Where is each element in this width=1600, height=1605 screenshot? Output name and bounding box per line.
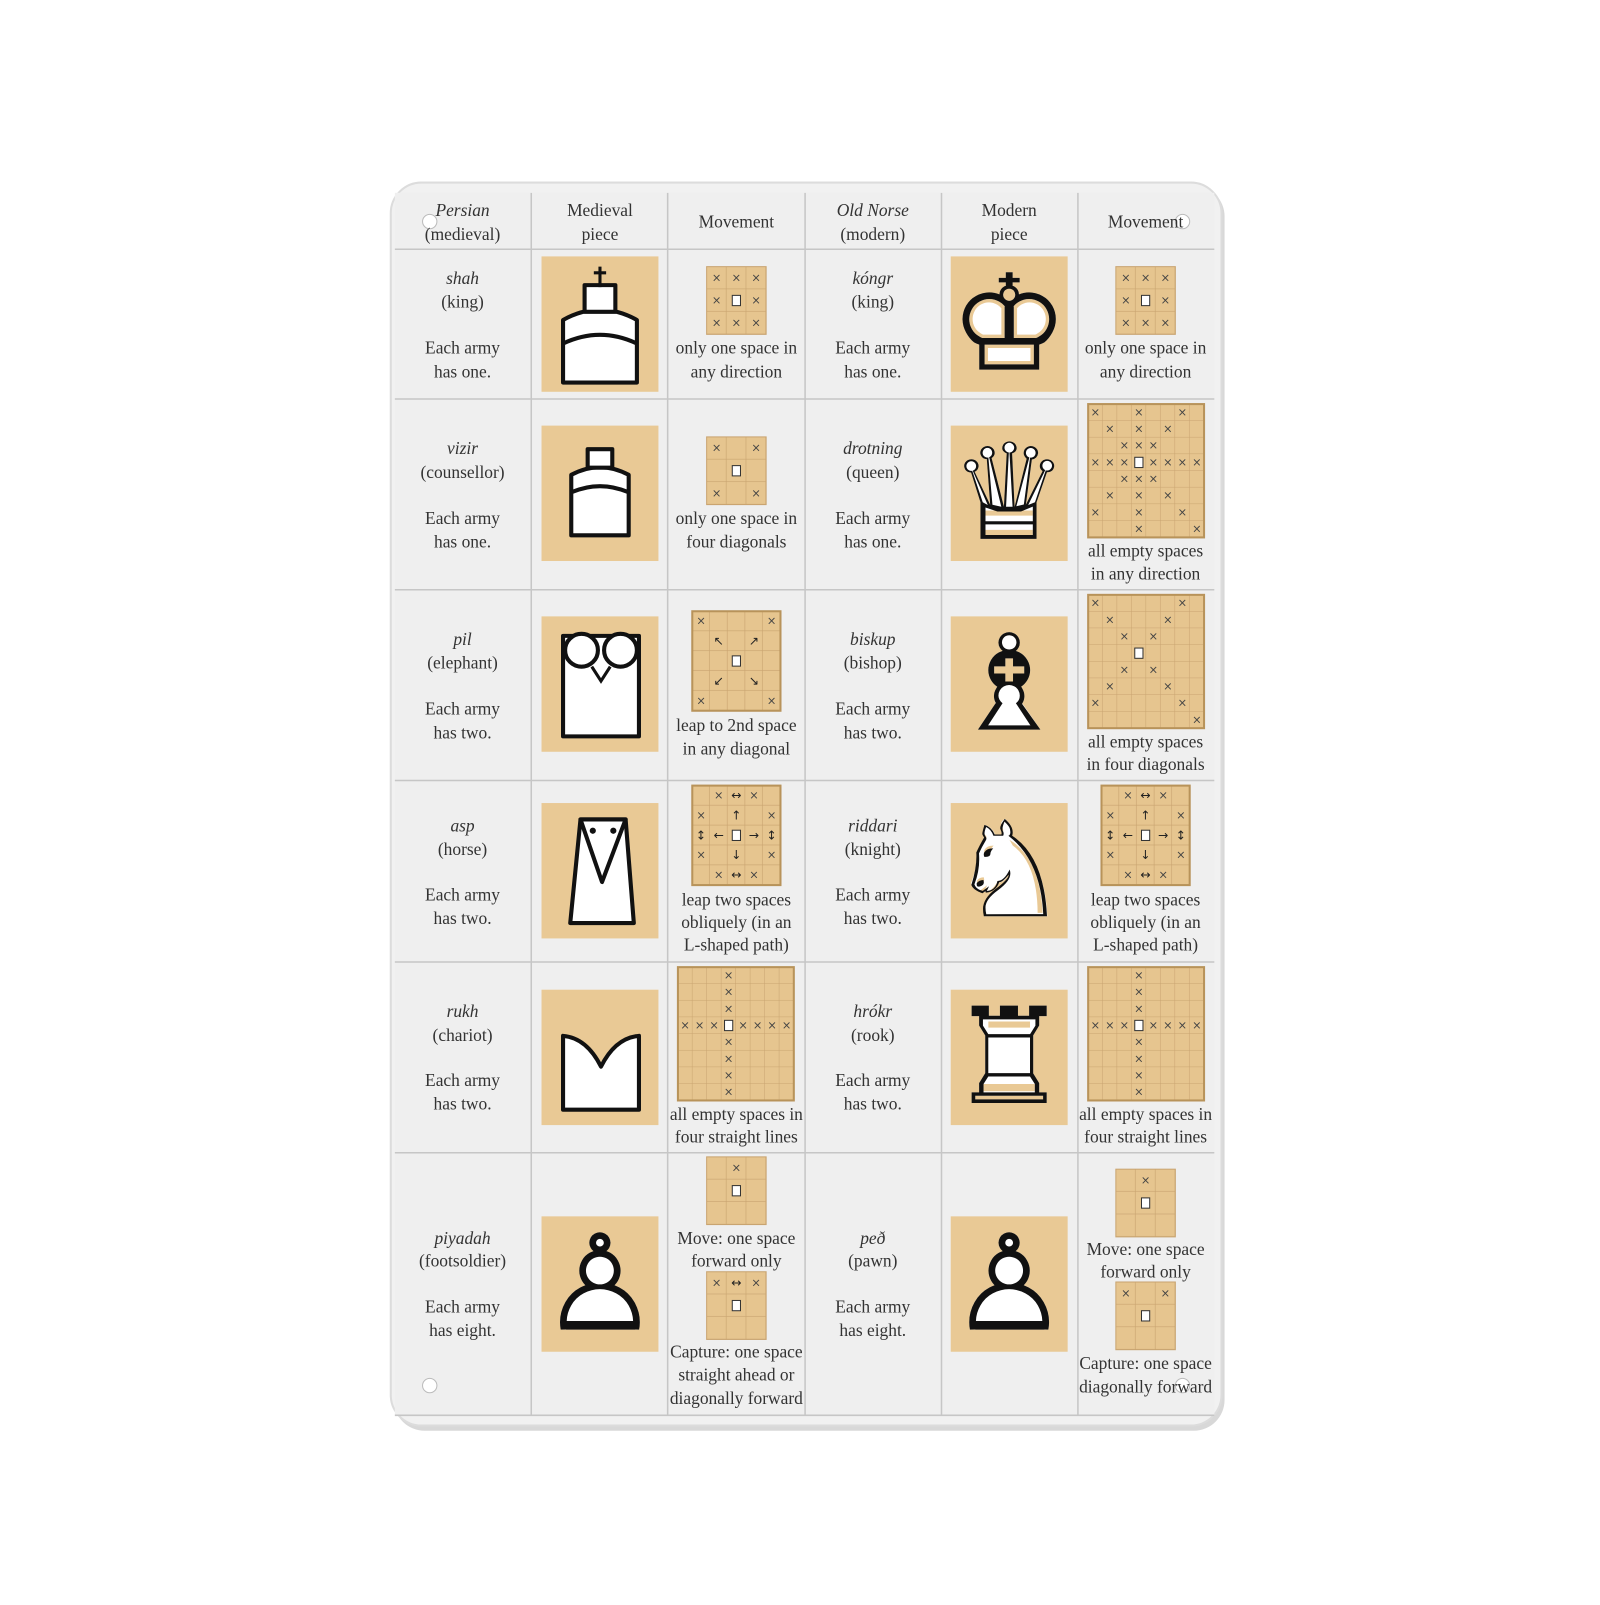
board: kongr: × bbox=[1141, 317, 1150, 330]
board: hrokr: × bbox=[1149, 1019, 1158, 1032]
boards: piyadah: × bbox=[712, 1277, 721, 1290]
board: biskup: × bbox=[1178, 697, 1187, 710]
board: pil: ↙ bbox=[714, 674, 724, 688]
board: drotning: × bbox=[1192, 456, 1202, 469]
board: biskup: × bbox=[1178, 597, 1187, 610]
board: drotning: × bbox=[1178, 456, 1187, 469]
header row: piece bbox=[991, 224, 1028, 244]
board: shah: × bbox=[732, 271, 741, 284]
board: drotning: × bbox=[1134, 439, 1144, 452]
board: asp: ↑ bbox=[731, 808, 742, 822]
icon: asp bbox=[570, 819, 634, 923]
names column 4: (knight) bbox=[845, 839, 901, 859]
names column 1: Each army bbox=[425, 338, 500, 358]
movement captions medieval: in any diagonal bbox=[683, 739, 790, 759]
names column 4: Each army bbox=[835, 884, 911, 904]
modern pieces: ♞ bbox=[949, 793, 1069, 948]
board: biskup: × bbox=[1091, 697, 1100, 710]
movement captions medieval: straight ahead or bbox=[678, 1364, 795, 1384]
board: rukh: × bbox=[724, 1086, 733, 1099]
movement captions modern: forward only bbox=[1100, 1262, 1191, 1282]
movement captions medieval: Move: one space bbox=[677, 1228, 796, 1248]
board: biskup bbox=[1088, 595, 1204, 728]
header row: Medieval bbox=[567, 200, 633, 220]
board: shah: × bbox=[712, 271, 721, 284]
board: riddari: ↓ bbox=[1140, 848, 1151, 862]
board: riddari: ↔ bbox=[1140, 868, 1151, 882]
names column 4: has two. bbox=[844, 722, 902, 742]
names column 4: (rook) bbox=[851, 1025, 895, 1045]
board: rukh: × bbox=[724, 1069, 733, 1082]
board: riddari: × bbox=[1106, 849, 1115, 862]
board: asp: ↕ bbox=[696, 828, 706, 842]
board: asp: × bbox=[749, 869, 759, 882]
movement captions medieval: Capture: one space bbox=[670, 1342, 803, 1362]
board: pil: ↖ bbox=[714, 634, 724, 648]
board: kongr: × bbox=[1121, 271, 1131, 284]
board: riddari: × bbox=[1123, 789, 1133, 802]
board: drotning: × bbox=[1105, 423, 1115, 436]
board: rukh: × bbox=[738, 1019, 748, 1032]
board: riddari: × bbox=[1106, 809, 1115, 822]
board: rukh: × bbox=[724, 1002, 733, 1015]
names column 1: piyadah bbox=[432, 1228, 491, 1248]
icon: piyadah: ♟ bbox=[540, 1207, 660, 1362]
board: drotning: × bbox=[1192, 523, 1202, 536]
board: vizir: × bbox=[751, 442, 761, 455]
board: pil: × bbox=[767, 694, 776, 707]
modern pieces: ♟ bbox=[949, 1207, 1069, 1362]
board: asp: ↕ bbox=[767, 828, 777, 842]
board: riddari bbox=[1101, 786, 1190, 885]
board: asp: × bbox=[696, 809, 706, 822]
board: drotning: × bbox=[1134, 423, 1144, 436]
board: biskup: × bbox=[1163, 680, 1173, 693]
board: drotning: × bbox=[1163, 489, 1173, 502]
board: rukh bbox=[678, 967, 794, 1100]
names column 1: shah bbox=[446, 268, 479, 288]
boards: piyadah: × bbox=[751, 1277, 761, 1290]
header row: piece bbox=[582, 224, 619, 244]
board: riddari: ← bbox=[1123, 828, 1133, 842]
board: asp: × bbox=[714, 869, 723, 882]
board: asp: ↓ bbox=[731, 848, 742, 862]
names column 1: Each army bbox=[425, 508, 500, 528]
board: hrokr: × bbox=[1134, 1002, 1144, 1015]
board: drotning: × bbox=[1134, 506, 1144, 519]
board: kongr: × bbox=[1141, 271, 1150, 284]
board: kongr: × bbox=[1161, 317, 1170, 330]
modern pieces: ♕ bbox=[949, 416, 1069, 571]
names column 1: rukh bbox=[447, 1001, 479, 1021]
board: drotning: × bbox=[1134, 523, 1144, 536]
board: hrokr: × bbox=[1091, 1019, 1100, 1032]
board: hrokr: × bbox=[1134, 986, 1144, 999]
board: pil: × bbox=[696, 615, 706, 628]
names column 4: Each army bbox=[835, 1297, 911, 1317]
boards: piyadah: × bbox=[732, 1162, 741, 1175]
board: drotning: × bbox=[1178, 406, 1187, 419]
board: drotning: × bbox=[1163, 456, 1173, 469]
names column 1: (footsoldier) bbox=[419, 1250, 506, 1270]
modern pieces: ♗ bbox=[949, 607, 1069, 762]
header row bbox=[425, 200, 1183, 244]
board: shah: × bbox=[751, 271, 761, 284]
names column 4: kóngr bbox=[852, 268, 893, 288]
board: drotning: × bbox=[1163, 423, 1173, 436]
board: hrokr: × bbox=[1134, 1086, 1144, 1099]
board: vizir: × bbox=[712, 487, 721, 500]
movement captions medieval bbox=[670, 338, 803, 1408]
names column 4: peð bbox=[858, 1228, 886, 1248]
icon: piyadah: ♙ bbox=[540, 1207, 660, 1362]
board: drotning: × bbox=[1134, 489, 1144, 502]
board: asp: × bbox=[696, 849, 706, 862]
header row: (modern) bbox=[840, 224, 905, 244]
names column 1 bbox=[419, 268, 506, 1340]
board: vizir bbox=[707, 437, 766, 505]
board: riddari: × bbox=[1176, 849, 1186, 862]
movement captions medieval: leap two spaces bbox=[682, 889, 791, 909]
boards: pawn: × bbox=[1161, 1287, 1170, 1300]
boards: pawn: × bbox=[1141, 1174, 1150, 1187]
movement captions medieval: leap to 2nd space bbox=[676, 715, 797, 735]
board: drotning bbox=[1088, 404, 1204, 537]
boards: pawn bbox=[1116, 1169, 1175, 1350]
board: vizir: × bbox=[751, 487, 761, 500]
board: kongr: × bbox=[1161, 294, 1170, 307]
modern pieces: ♝ bbox=[949, 607, 1069, 762]
board: shah: × bbox=[732, 317, 741, 330]
board: riddari: → bbox=[1158, 828, 1168, 842]
board: hrokr: × bbox=[1105, 1019, 1115, 1032]
movement captions modern: all empty spaces in bbox=[1079, 1104, 1212, 1124]
names column 4: Each army bbox=[835, 1070, 911, 1090]
board: rukh: × bbox=[724, 1052, 733, 1065]
board: rukh: × bbox=[680, 1019, 690, 1032]
movement captions modern: in four diagonals bbox=[1087, 754, 1205, 774]
board: shah: × bbox=[712, 317, 721, 330]
names column 4: riddari bbox=[848, 816, 898, 836]
board: drotning: × bbox=[1091, 506, 1100, 519]
names column 1: (chariot) bbox=[433, 1025, 493, 1045]
boards: pawn: × bbox=[1121, 1287, 1131, 1300]
board: biskup: × bbox=[1120, 663, 1129, 676]
header row: (medieval) bbox=[425, 224, 500, 244]
modern pieces: ♖ bbox=[949, 980, 1069, 1135]
board: rukh: × bbox=[724, 969, 733, 982]
board: rukh: × bbox=[753, 1019, 762, 1032]
board: asp: × bbox=[714, 789, 723, 802]
names column 1: has one. bbox=[434, 361, 491, 381]
board: biskup: × bbox=[1105, 680, 1115, 693]
names column 1: (king) bbox=[441, 292, 484, 312]
names column 4: biskup bbox=[850, 629, 896, 649]
movement captions modern: obliquely (in an bbox=[1090, 912, 1201, 932]
board: biskup: × bbox=[1120, 630, 1129, 643]
board: rukh: × bbox=[695, 1019, 704, 1032]
modern pieces: ♛ bbox=[949, 416, 1069, 571]
movement captions modern: L-shaped path) bbox=[1093, 935, 1198, 955]
names column 1: Each army bbox=[425, 699, 500, 719]
names column 4: has one. bbox=[844, 361, 901, 381]
board: shah bbox=[707, 267, 766, 334]
board: pil: ↘ bbox=[749, 674, 759, 688]
names column 1: has two. bbox=[434, 1094, 492, 1114]
movement captions modern: in any direction bbox=[1091, 563, 1201, 583]
movement captions modern: all empty spaces bbox=[1088, 732, 1203, 752]
movement captions modern: Capture: one space bbox=[1079, 1353, 1212, 1373]
header row: Movement bbox=[699, 212, 774, 232]
modern pieces: ♚ bbox=[949, 247, 1069, 402]
names column 1: (horse) bbox=[438, 839, 487, 859]
board: drotning: × bbox=[1134, 406, 1144, 419]
names column 4: has two. bbox=[844, 908, 902, 928]
board: hrokr: × bbox=[1178, 1019, 1187, 1032]
names column 4: (pawn) bbox=[848, 1250, 898, 1270]
movement captions modern: four straight lines bbox=[1084, 1126, 1207, 1146]
board: riddari: × bbox=[1123, 869, 1133, 882]
boards: piyadah bbox=[707, 1157, 766, 1339]
board: drotning: × bbox=[1134, 473, 1144, 486]
movement captions modern: Move: one space bbox=[1087, 1239, 1205, 1259]
board: asp bbox=[692, 786, 780, 885]
names column 1: has one. bbox=[434, 532, 491, 552]
header row: Movement bbox=[1108, 212, 1183, 232]
board: asp: × bbox=[749, 789, 759, 802]
names column 1: vizir bbox=[447, 438, 478, 458]
names column 1: (elephant) bbox=[427, 653, 498, 673]
boards: piyadah: ↔ bbox=[731, 1276, 742, 1290]
board: vizir: × bbox=[712, 442, 721, 455]
board: drotning: × bbox=[1149, 439, 1158, 452]
board: riddari: ↕ bbox=[1105, 828, 1115, 842]
names column 1: has two. bbox=[434, 908, 492, 928]
board: rukh: × bbox=[709, 1019, 719, 1032]
medieval pieces bbox=[540, 256, 660, 1362]
board: riddari: × bbox=[1176, 809, 1186, 822]
board: drotning: × bbox=[1149, 473, 1158, 486]
board: pil: × bbox=[696, 694, 706, 707]
modern pieces: ♔ bbox=[949, 247, 1069, 402]
board: rukh: × bbox=[724, 986, 733, 999]
icon: pil bbox=[563, 634, 639, 736]
names column 1: asp bbox=[450, 816, 475, 836]
board: asp: × bbox=[767, 809, 776, 822]
board: hrokr: × bbox=[1134, 1036, 1144, 1049]
names column 4: Each army bbox=[835, 699, 911, 719]
board: hrokr: × bbox=[1192, 1019, 1202, 1032]
board: asp: ↔ bbox=[731, 789, 742, 803]
board: kongr bbox=[1116, 267, 1175, 334]
modern pieces: ♙ bbox=[949, 1207, 1069, 1362]
movement captions medieval: L-shaped path) bbox=[684, 935, 789, 955]
movement captions medieval: only one space in bbox=[676, 508, 797, 528]
board: rukh: × bbox=[782, 1019, 791, 1032]
board: drotning: × bbox=[1105, 489, 1115, 502]
board: asp: × bbox=[767, 849, 776, 862]
board: kongr: × bbox=[1161, 271, 1170, 284]
board: drotning: × bbox=[1091, 406, 1100, 419]
names column 4 bbox=[835, 268, 911, 1340]
header row: Old Norse bbox=[837, 200, 909, 220]
modern pieces: ♘ bbox=[949, 793, 1069, 948]
board: drotning: × bbox=[1091, 456, 1100, 469]
movement captions medieval: forward only bbox=[691, 1250, 782, 1270]
board: drotning: × bbox=[1178, 506, 1187, 519]
board: drotning: × bbox=[1149, 456, 1158, 469]
board: biskup: × bbox=[1105, 613, 1115, 626]
movement captions medieval: only one space in bbox=[676, 338, 797, 358]
board: kongr: × bbox=[1121, 317, 1131, 330]
movement captions modern: all empty spaces bbox=[1088, 541, 1203, 561]
names column 4: (bishop) bbox=[844, 653, 902, 673]
names column 1: pil bbox=[451, 629, 472, 649]
names column 1: has two. bbox=[434, 722, 492, 742]
header row: Modern bbox=[982, 200, 1037, 220]
board: hrokr: × bbox=[1163, 1019, 1173, 1032]
names column 4: has one. bbox=[844, 532, 901, 552]
movement captions medieval: four diagonals bbox=[686, 532, 787, 552]
board: hrokr: × bbox=[1134, 1052, 1144, 1065]
board: riddari: ↕ bbox=[1176, 828, 1186, 842]
board: asp: ↔ bbox=[731, 868, 742, 882]
board: shah: × bbox=[751, 294, 761, 307]
movement captions modern: only one space in bbox=[1085, 338, 1207, 358]
names column 4: (queen) bbox=[846, 462, 900, 482]
movement captions medieval: all empty spaces in bbox=[670, 1104, 803, 1124]
board: riddari: × bbox=[1159, 869, 1168, 882]
board: hrokr bbox=[1088, 967, 1204, 1100]
names column 4: (king) bbox=[851, 292, 894, 312]
movement captions modern: any direction bbox=[1100, 361, 1192, 381]
board: drotning: × bbox=[1105, 456, 1115, 469]
movement captions modern bbox=[1079, 338, 1212, 1397]
movement captions medieval: any direction bbox=[691, 361, 782, 381]
board: hrokr: × bbox=[1134, 969, 1144, 982]
board: biskup: × bbox=[1149, 663, 1158, 676]
movement captions medieval: diagonally forward bbox=[670, 1388, 803, 1408]
names column 1: Each army bbox=[425, 1070, 500, 1090]
icon: vizir bbox=[571, 449, 629, 535]
board: rukh: × bbox=[767, 1019, 777, 1032]
names column 4: Each army bbox=[835, 508, 911, 528]
board: biskup: × bbox=[1163, 613, 1173, 626]
board: biskup: × bbox=[1192, 713, 1202, 726]
movement captions medieval: four straight lines bbox=[675, 1126, 798, 1146]
icon: rukh bbox=[563, 1036, 639, 1110]
names column 1: Each army bbox=[425, 1297, 500, 1317]
names column 1: has eight. bbox=[429, 1320, 496, 1340]
board: rukh: × bbox=[724, 1036, 733, 1049]
movement captions modern: leap two spaces bbox=[1091, 889, 1200, 909]
sign panel bbox=[391, 183, 1225, 1431]
board: asp: → bbox=[749, 828, 759, 842]
modern pieces: ♜ bbox=[949, 980, 1069, 1135]
modern pieces bbox=[949, 247, 1069, 1362]
board: hrokr: × bbox=[1120, 1019, 1129, 1032]
movement captions medieval: obliquely (in an bbox=[681, 912, 792, 932]
board: pil bbox=[692, 611, 780, 711]
names column 4: has two. bbox=[844, 1094, 902, 1114]
names column 1: (counsellor) bbox=[420, 462, 505, 482]
board: pil: ↗ bbox=[749, 634, 759, 648]
icon: shah bbox=[563, 267, 637, 383]
names column 4: Each army bbox=[835, 338, 911, 358]
board: riddari: ↔ bbox=[1140, 789, 1151, 803]
names column 1: Each army bbox=[425, 884, 500, 904]
board: kongr: × bbox=[1121, 294, 1131, 307]
board: riddari: × bbox=[1159, 789, 1168, 802]
board: shah: × bbox=[751, 317, 761, 330]
board: biskup: × bbox=[1091, 597, 1100, 610]
names column 4: has eight. bbox=[839, 1320, 906, 1340]
board: asp: ← bbox=[714, 828, 724, 842]
board: drotning: × bbox=[1120, 456, 1129, 469]
board: hrokr: × bbox=[1134, 1069, 1144, 1082]
names column 4: drotning bbox=[843, 438, 903, 458]
board: drotning: × bbox=[1120, 439, 1129, 452]
board: drotning: × bbox=[1120, 473, 1129, 486]
board: pil: × bbox=[767, 615, 776, 628]
board: riddari: ↑ bbox=[1140, 808, 1151, 822]
board: shah: × bbox=[712, 294, 721, 307]
movement captions modern: diagonally forward bbox=[1079, 1377, 1212, 1397]
names column 4: hrókr bbox=[853, 1001, 892, 1021]
board: biskup: × bbox=[1149, 630, 1158, 643]
header row: Persian bbox=[434, 200, 490, 220]
